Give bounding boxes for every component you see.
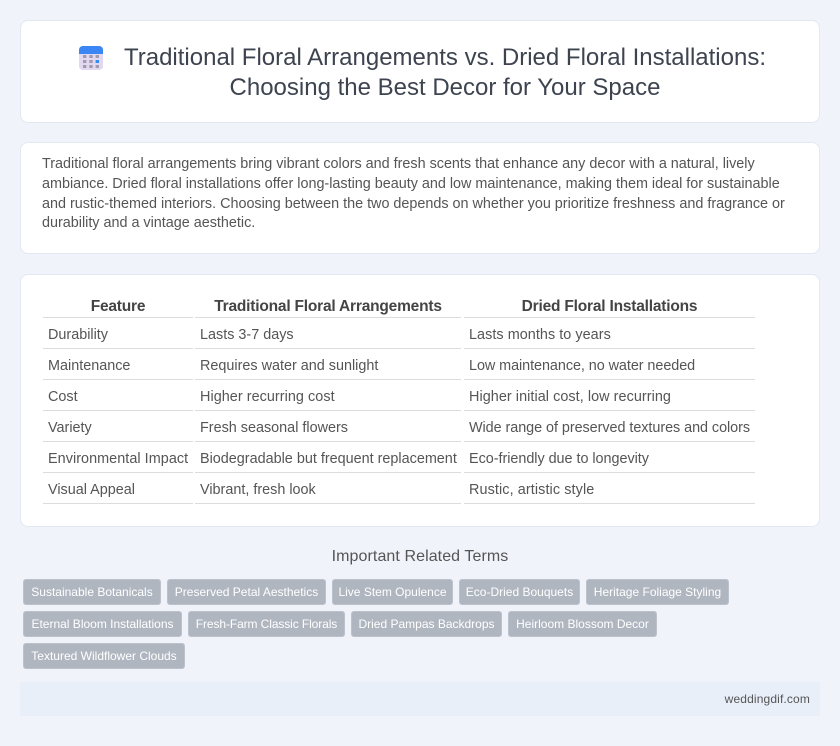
related terms tags bbox=[23, 579, 729, 669]
comparison table card bbox=[20, 274, 820, 527]
intro text: ambiance. Dried floral installations offer long-lasting beauty and low maintenance, making them ideal for sustainable bbox=[42, 176, 780, 192]
related terms tags: Sustainable Botanicals bbox=[31, 585, 153, 599]
intro card bbox=[20, 142, 820, 254]
related terms tags: Live Stem Opulence bbox=[338, 585, 447, 599]
comparison table: Feature bbox=[91, 298, 145, 315]
related terms tags: Eternal Bloom Installations bbox=[31, 617, 174, 631]
comparison table: Visual Appeal bbox=[48, 482, 135, 498]
intro text bbox=[42, 156, 785, 231]
comparison table: Durability bbox=[48, 327, 108, 343]
comparison table: Cost bbox=[48, 389, 78, 405]
related terms tags: Eco-Dried Bouquets bbox=[466, 585, 573, 599]
comparison table: Variety bbox=[48, 420, 92, 436]
comparison table: Traditional Floral Arrangements bbox=[214, 298, 442, 315]
related terms tags: Textured Wildflower Clouds bbox=[31, 649, 177, 663]
title: Choosing the Best Decor for Your Space bbox=[230, 74, 660, 101]
related terms tags: Preserved Petal Aesthetics bbox=[175, 585, 318, 599]
related terms tags: Heritage Foliage Styling bbox=[594, 585, 721, 599]
comparison table: Vibrant, fresh look bbox=[200, 482, 316, 498]
intro text: Traditional floral arrangements bring vibrant colors and fresh scents that enhance any decor with a natural, lively bbox=[42, 156, 755, 172]
comparison table bbox=[43, 298, 755, 504]
header card bbox=[20, 20, 820, 123]
comparison table: Low maintenance, no water needed bbox=[469, 358, 695, 374]
icon: calendar bbox=[79, 46, 103, 70]
title bbox=[124, 44, 766, 101]
title: Traditional Floral Arrangements vs. Dried Floral Installations: bbox=[124, 44, 766, 71]
related terms tags: Dried Pampas Backdrops bbox=[358, 617, 495, 631]
related terms heading: Important Related Terms bbox=[332, 548, 508, 565]
comparison table: Wide range of preserved textures and colors bbox=[469, 420, 750, 436]
intro text: durability and a vintage aesthetic. bbox=[42, 215, 255, 231]
comparison table: Rustic, artistic style bbox=[469, 482, 594, 498]
comparison table: Maintenance bbox=[48, 358, 130, 374]
comparison table: Higher recurring cost bbox=[200, 389, 335, 405]
related terms tags: Fresh-Farm Classic Florals bbox=[196, 617, 337, 631]
footer bar bbox=[20, 682, 820, 716]
comparison table: Higher initial cost, low recurring bbox=[469, 389, 671, 405]
intro text: and rustic-themed interiors. Choosing between the two depends on whether you prioritize freshness and fragrance or bbox=[42, 196, 785, 212]
comparison table: Environmental Impact bbox=[48, 451, 188, 467]
footer source: weddingdif.com bbox=[725, 692, 810, 706]
comparison table: Eco-friendly due to longevity bbox=[469, 451, 649, 467]
comparison table: Dried Floral Installations bbox=[522, 298, 697, 315]
comparison table: Lasts 3-7 days bbox=[200, 327, 294, 343]
related terms tags: Heirloom Blossom Decor bbox=[516, 617, 649, 631]
comparison table: Lasts months to years bbox=[469, 327, 611, 343]
comparison table: Fresh seasonal flowers bbox=[200, 420, 348, 436]
comparison table: Requires water and sunlight bbox=[200, 358, 378, 374]
comparison table: Biodegradable but frequent replacement bbox=[200, 451, 457, 467]
